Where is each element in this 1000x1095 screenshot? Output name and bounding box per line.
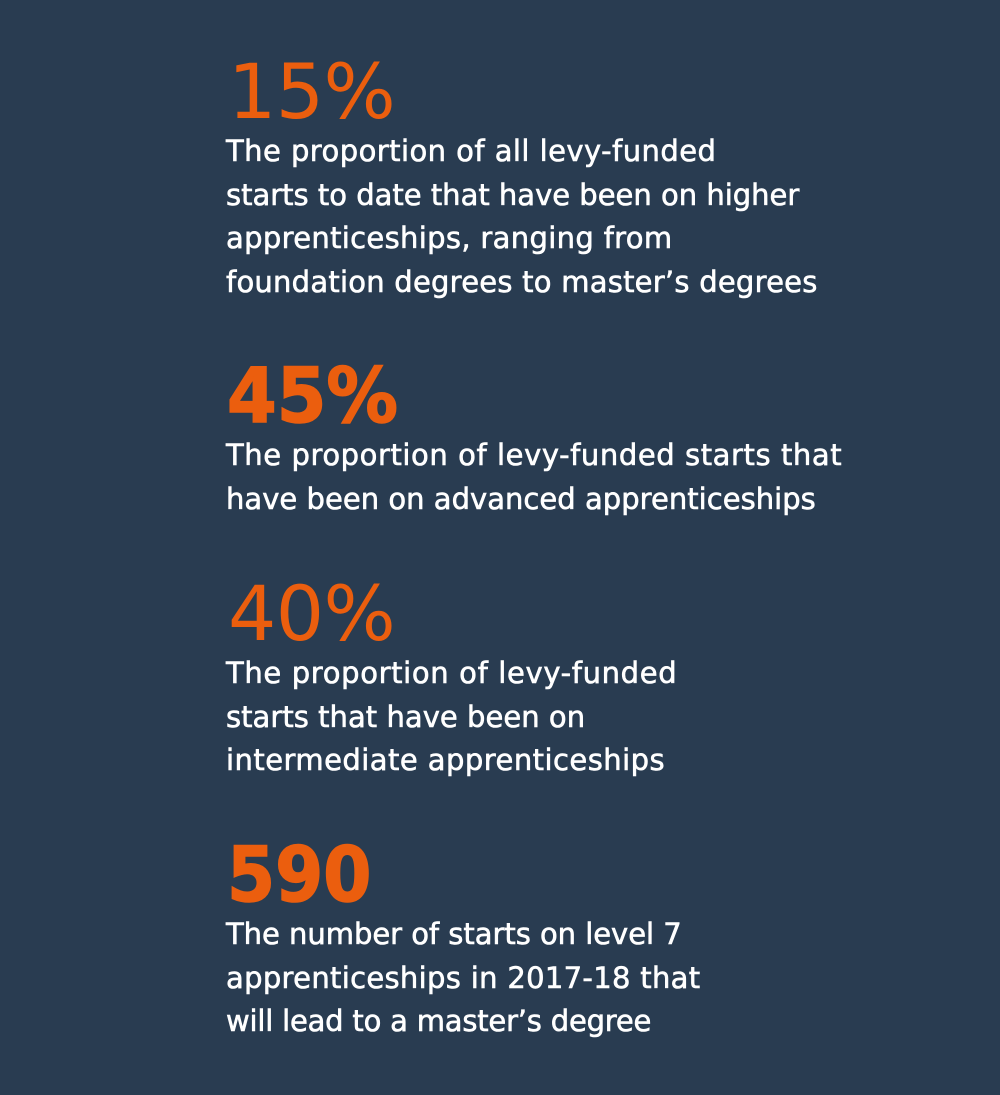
stat 4 description: apprenticeships in 2017-18 that (226, 960, 700, 994)
stat 1 description: foundation degrees to master’s degrees (226, 264, 818, 298)
stat 3 description: starts that have been on (226, 700, 585, 734)
stat 2 number: 45%: 45% (227, 351, 398, 440)
stat 1 description (226, 134, 818, 298)
stat 1 description: apprenticeships, ranging from (226, 221, 672, 255)
stat 4 description: will lead to a master’s degree (226, 1004, 651, 1038)
stat 1 number: 15%: 15% (228, 47, 395, 136)
stat 2 description: have been on advanced apprenticeships (226, 482, 816, 516)
stat 3 description: The proportion of levy-funded (226, 656, 677, 690)
stat 4 description: The number of starts on level 7 (226, 917, 682, 951)
stat 3 description (226, 656, 677, 777)
stat 4 number: 590: 590 (227, 830, 371, 919)
stat 2 description (226, 438, 842, 516)
stat 4 description (226, 917, 700, 1038)
stat 1 description: starts to date that have been on higher (226, 178, 799, 212)
stat 3 description: intermediate apprenticeships (226, 743, 665, 777)
stat 3 number: 40%: 40% (228, 569, 395, 658)
stat 2 description: The proportion of levy-funded starts that (226, 438, 842, 472)
stat 1 description: The proportion of all levy-funded (226, 134, 716, 168)
